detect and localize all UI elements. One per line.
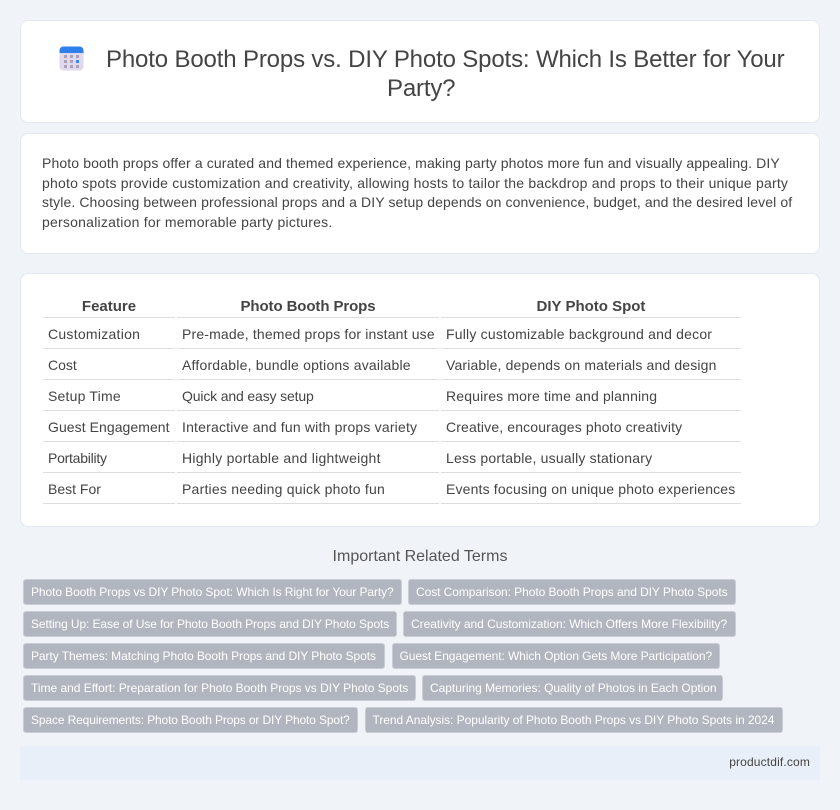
row: setup time: Setup Time (48, 388, 121, 404)
table header: DIY Photo Spot (537, 298, 645, 315)
row: best for (48, 481, 735, 497)
row: customization: Customization (48, 326, 140, 342)
tag: Cost Comparison: Photo Booth Props and DIY Photo Spots (416, 585, 728, 599)
tag list (23, 579, 783, 733)
row: best for: Parties needing quick photo fun (182, 481, 385, 497)
heading: related terms: Important Related Terms (333, 548, 507, 565)
row: guest engagement: Guest Engagement (48, 419, 170, 435)
tag (403, 611, 736, 637)
footer (20, 746, 820, 780)
tag (23, 611, 397, 637)
tag: Capturing Memories: Quality of Photos in Each Option (430, 681, 717, 695)
row: best for: Best For (48, 481, 101, 497)
table header: Photo Booth Props (241, 298, 375, 315)
tag (392, 643, 720, 669)
panel: introduction (20, 133, 820, 254)
tag: Time and Effort: Preparation for Photo Booth Props vs DIY Photo Spots (31, 681, 408, 695)
panel: header (20, 20, 820, 123)
panel: comparison table (20, 273, 820, 527)
text block: introduction: personalization for memorable party pictures. (42, 214, 332, 230)
footer link: productdif.com (729, 755, 810, 769)
table header (82, 298, 646, 315)
tag: Trend Analysis: Popularity of Photo Booth Props vs DIY Photo Spots in 2024 (372, 713, 774, 727)
row: cost: Variable, depends on materials and design (446, 357, 717, 373)
row: customization: Pre-made, themed props for instant use (182, 326, 435, 342)
row: setup time: Requires more time and planning (446, 388, 657, 404)
tag (23, 579, 402, 605)
table header: Feature (82, 298, 136, 315)
text block: introduction: style. Choosing between professional props and a DIY setup depends on convenience, budget, and the desired level of (42, 194, 792, 210)
row: cost (48, 357, 717, 373)
comparison table (43, 298, 741, 504)
row: setup time (48, 388, 657, 404)
row: guest engagement: Interactive and fun with props variety (182, 419, 417, 435)
row: portability (48, 450, 652, 466)
row: cost: Cost (48, 357, 77, 373)
text block: introduction (42, 155, 792, 230)
title (106, 46, 784, 102)
tag (23, 707, 358, 733)
row: guest engagement: Creative, encourages photo creativity (446, 419, 682, 435)
tag (23, 675, 416, 701)
row: guest engagement (48, 419, 682, 435)
text block: introduction: photo spots provide customization and creativity, allowing hosts to tailor the backdrop and props to their unique party (42, 175, 788, 191)
row: customization (48, 326, 712, 342)
tag (364, 707, 783, 733)
row: portability: Portability (48, 450, 107, 466)
icon: calendar (60, 46, 84, 70)
row: setup time: Quick and easy setup (182, 388, 314, 404)
tag: Space Requirements: Photo Booth Props or DIY Photo Spot? (31, 713, 350, 727)
tag: Guest Engagement: Which Option Gets More Participation? (400, 649, 712, 663)
title: Party? (387, 75, 455, 102)
row: portability: Highly portable and lightweight (182, 450, 381, 466)
tag: Setting Up: Ease of Use for Photo Booth Props and DIY Photo Spots (31, 617, 389, 631)
tag (422, 675, 723, 701)
row: cost: Affordable, bundle options available (182, 357, 411, 373)
tag: Photo Booth Props vs DIY Photo Spot: Which Is Right for Your Party? (31, 585, 394, 599)
tag: Party Themes: Matching Photo Booth Props and DIY Photo Spots (31, 649, 376, 663)
row: customization: Fully customizable background and decor (446, 326, 712, 342)
text block: introduction: Photo booth props offer a curated and themed experience, making party photos more fun and visually appealing. DIY (42, 155, 780, 171)
row: portability: Less portable, usually stationary (446, 450, 652, 466)
tag: Creativity and Customization: Which Offers More Flexibility? (411, 617, 727, 631)
row: best for: Events focusing on unique photo experiences (446, 481, 735, 497)
title: Photo Booth Props vs. DIY Photo Spots: Which Is Better for Your (106, 46, 784, 73)
tag (408, 579, 736, 605)
tag (23, 643, 384, 669)
